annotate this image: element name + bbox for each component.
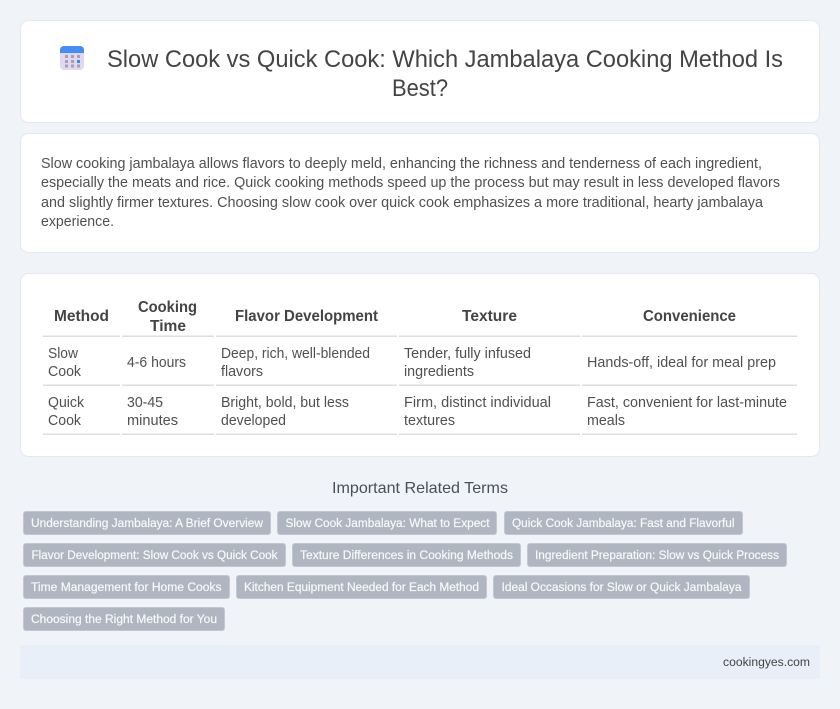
tag: flavor development: Flavor Development: Slow Cook vs Quick Cook — [32, 548, 278, 562]
table row: slow cook: Deep, rich, well-blended — [221, 346, 370, 362]
intro paragraph: and slightly firmer textures. Choosing slow cook over quick cook emphasizes a more traditional, hearty jambalaya — [41, 195, 764, 211]
tag: choosing the right method — [24, 608, 224, 630]
tag: ingredient preparation: Ingredient Preparation: Slow vs Quick Process — [535, 548, 779, 562]
intro paragraph: Slow cooking jambalaya allows flavors to deeply meld, enhancing the richness and tenderness of each ingredient, — [41, 156, 762, 172]
tag: choosing the right method: Choosing the Right Method for You — [31, 612, 217, 626]
table row: quick cook: 30-45 — [127, 395, 163, 411]
icon: calendar — [60, 46, 84, 70]
table row: slow cook: Tender, fully infused — [404, 346, 531, 362]
panel: title card — [20, 20, 820, 122]
table header row: Time — [150, 318, 186, 335]
table row: quick cook: meals — [587, 413, 625, 429]
title — [107, 46, 783, 102]
tag: understanding jambalaya — [24, 512, 270, 534]
table row: slow cook: Hands-off, ideal for meal prep — [587, 355, 776, 371]
title: Slow Cook vs Quick Cook: Which Jambalaya Cooking Method Is — [107, 46, 783, 73]
table row: quick cook: developed — [221, 413, 286, 429]
intro paragraph: especially the meats and rice. Quick cooking methods speed up the process but may result in less developed flavors — [41, 175, 780, 191]
tag: time management — [24, 576, 230, 598]
related terms tags — [24, 512, 786, 630]
table row: quick cook: Fast, convenient for last-minute — [587, 395, 787, 411]
tag: texture differences — [292, 544, 520, 566]
table row: slow cook: Slow — [48, 346, 78, 362]
panel: intro text card — [20, 134, 820, 252]
table header row: Cooking — [138, 299, 197, 316]
tag: ideal occasions — [494, 576, 750, 598]
table row: slow cook: Cook — [48, 364, 82, 380]
table row: quick cook: Bright, bold, but less — [221, 395, 349, 411]
table row: quick cook: minutes — [127, 413, 178, 429]
table header row: Convenience — [643, 308, 736, 325]
table header row — [54, 299, 736, 335]
tag: understanding jambalaya: Understanding Jambalaya: A Brief Overview — [31, 516, 263, 530]
table header row: Flavor Development — [235, 308, 379, 325]
table row: quick cook: Cook — [48, 413, 82, 429]
tag: slow cook jambalaya — [278, 512, 496, 534]
table row: slow cook — [48, 346, 776, 380]
intro paragraph — [41, 156, 780, 230]
tag: slow cook jambalaya: Slow Cook Jambalaya: What to Expect — [286, 516, 490, 530]
table row: slow cook: 4-6 hours — [127, 355, 186, 371]
tag: quick cook jambalaya: Quick Cook Jambalaya: Fast and Flavorful — [512, 516, 734, 530]
panel: comparison table card — [20, 274, 820, 456]
footer bar: cookingyes.com — [723, 655, 810, 669]
title: Best? — [392, 75, 448, 102]
tag: flavor development — [24, 544, 286, 566]
table row: quick cook: textures — [404, 413, 455, 429]
table row: quick cook: Quick — [48, 395, 85, 411]
table row: slow cook: ingredients — [404, 364, 474, 380]
tag: kitchen equipment: Kitchen Equipment Needed for Each Method — [244, 580, 479, 594]
heading: important related terms: Important Related Terms — [332, 480, 508, 497]
tag: quick cook jambalaya — [504, 512, 742, 534]
table row: quick cook — [48, 395, 787, 429]
table row: slow cook: flavors — [221, 364, 263, 380]
table header row: Method — [54, 308, 109, 325]
tag: ideal occasions: Ideal Occasions for Slow or Quick Jambalaya — [502, 580, 742, 594]
footer bar — [20, 645, 820, 679]
tag: kitchen equipment — [236, 576, 486, 598]
table header row: Texture — [462, 308, 517, 325]
table row: quick cook: Firm, distinct individual — [404, 395, 551, 411]
intro paragraph: experience. — [41, 214, 114, 230]
tag: time management: Time Management for Home Cooks — [31, 580, 222, 594]
tag: texture differences: Texture Differences in Cooking Methods — [300, 548, 513, 562]
tag: ingredient preparation — [528, 544, 786, 566]
